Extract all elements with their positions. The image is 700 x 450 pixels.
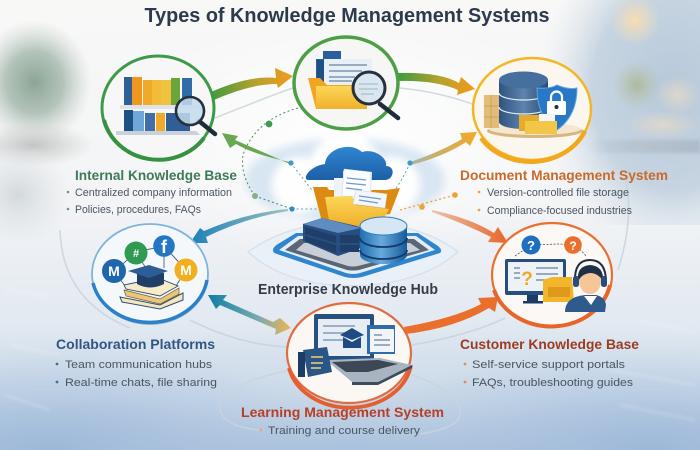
panel: learning management system	[241, 303, 444, 437]
icon: question badges: ?	[527, 238, 535, 253]
icon: folder	[543, 277, 574, 302]
icon: chat badges: M	[180, 262, 192, 278]
bullet list	[67, 187, 232, 216]
hub cloud	[306, 147, 393, 180]
central hub: enterprise knowledge hub	[248, 147, 458, 298]
panel: collaboration platforms	[56, 224, 217, 389]
bullet list: Policies, procedures, FAQs	[75, 204, 201, 216]
icon: chat badges: M	[108, 263, 120, 279]
bullet list: Training and course delivery	[268, 425, 421, 437]
hub server	[303, 218, 361, 256]
circle	[92, 224, 208, 324]
arrow: collaboration to learning, two-way	[208, 295, 291, 335]
bullet list: Self-service support portals	[472, 359, 626, 371]
heading: Learning Management System	[241, 404, 444, 420]
icon: notebook	[298, 347, 332, 377]
icon: chat badges: f	[161, 237, 168, 257]
icon: shield lock	[537, 85, 577, 130]
arrow: learning to customer base	[404, 297, 498, 334]
arrow: knowledge base to file search	[211, 68, 293, 100]
heading: Collaboration Platforms	[56, 336, 215, 352]
arrow: hub to document system	[410, 132, 477, 165]
bullet list: Compliance-focused industries	[487, 205, 632, 217]
arrow: hub to knowledge base	[222, 133, 290, 164]
icon: laptop and course cards	[314, 314, 412, 385]
icon: chat badges	[102, 235, 198, 290]
arrow: hub to collaboration platforms	[190, 209, 288, 243]
hub database	[360, 217, 407, 264]
icon: bookshelf	[116, 77, 202, 135]
hub folder	[313, 169, 400, 226]
bullet list: Team communication hubs	[65, 359, 213, 371]
bullet list	[464, 359, 634, 389]
bullet list	[478, 187, 632, 217]
title: Types of Knowledge Management Systems	[144, 5, 550, 27]
circle	[473, 58, 591, 162]
hub platform	[248, 222, 458, 286]
circle	[102, 56, 214, 160]
bullet list: Version-controlled file storage	[487, 187, 629, 199]
icon: database	[484, 72, 583, 138]
panel: internal knowledge base	[67, 56, 237, 216]
arrow: file search to document system	[398, 73, 475, 95]
icon: folder	[308, 51, 372, 109]
arrow: hub to customer base	[432, 210, 508, 243]
dotted connectors	[242, 108, 458, 212]
icon: magnifier	[176, 97, 215, 134]
icon: question badges	[515, 236, 586, 256]
bullet list: Centralized company information	[75, 187, 232, 199]
heading: Document Management System	[460, 167, 668, 183]
heading: Internal Knowledge Base	[75, 167, 237, 183]
hub cloud halo	[245, 134, 445, 222]
circle	[287, 303, 411, 408]
icon: monitor: ?	[521, 269, 533, 290]
icon: magnifier	[353, 72, 398, 118]
icon: question badges: ?	[569, 239, 577, 253]
panel: document management system	[460, 58, 668, 217]
icon: monitor	[505, 259, 566, 304]
icon: folders	[519, 114, 557, 134]
hub label: Enterprise Knowledge Hub	[258, 282, 438, 298]
panel: customer knowledge base	[460, 223, 639, 389]
bullet list	[56, 359, 217, 389]
icon: books and cap	[120, 265, 183, 309]
circle	[294, 37, 398, 129]
panel: file search	[294, 37, 398, 129]
bullet list: Real-time chats, file sharing	[65, 377, 217, 389]
bullet list: FAQs, troubleshooting guides	[472, 377, 634, 389]
icon: chat badges: #	[133, 248, 139, 260]
circle	[492, 223, 612, 327]
heading: Customer Knowledge Base	[460, 336, 639, 352]
icon: support agent	[565, 260, 607, 312]
